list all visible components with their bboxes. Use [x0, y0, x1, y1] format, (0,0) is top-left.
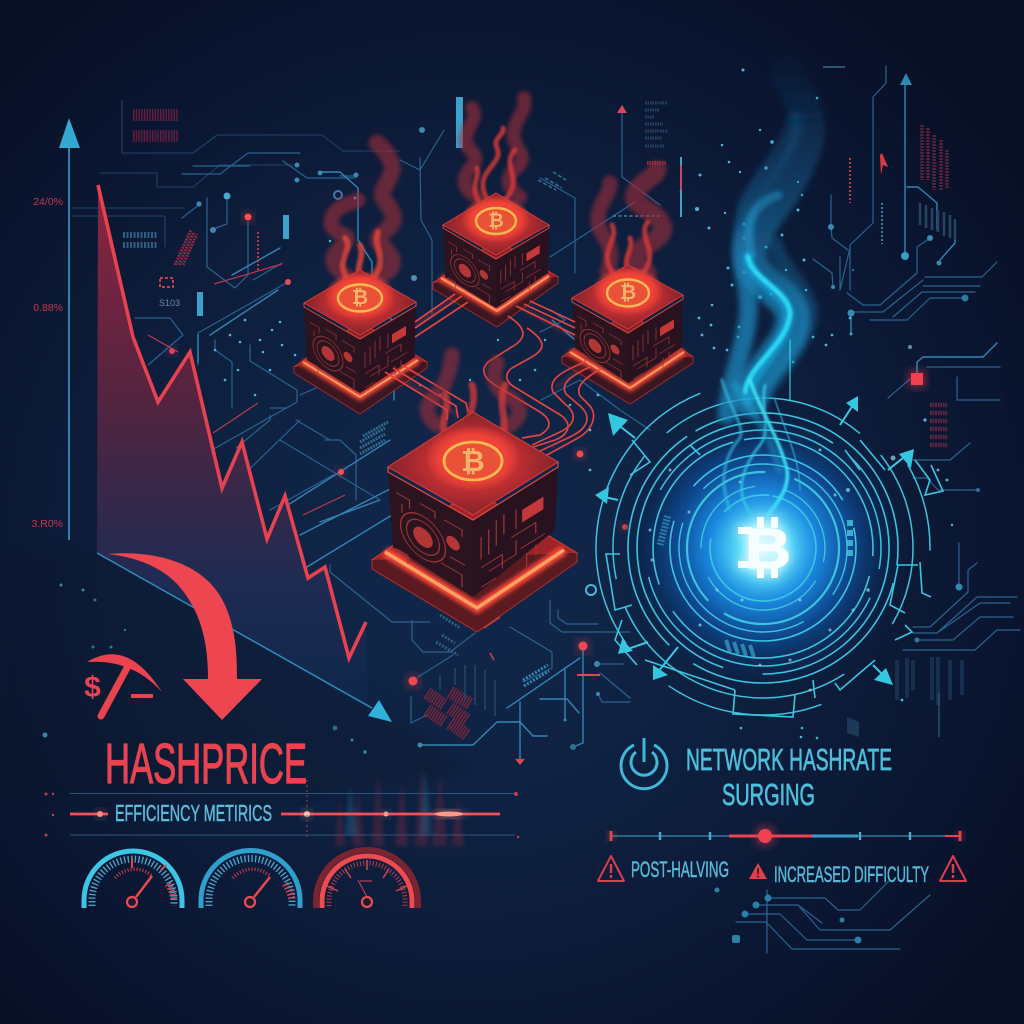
efficiency metrics band [44, 765, 519, 846]
y axis labels: 24/0% [33, 196, 63, 208]
bottom right circuits [736, 880, 930, 953]
top right circuits [813, 66, 886, 290]
icon: pickaxe and dollar: $ [84, 671, 101, 704]
icon: pickaxe and dollar [84, 654, 162, 716]
down arrow [107, 553, 262, 720]
title: hashprice: HASHPRICE [105, 732, 307, 796]
warning label: post-halving [598, 856, 729, 882]
bitcoin symbol on core: B [745, 517, 791, 581]
warning label: post-halving: POST-HALVING [631, 857, 729, 882]
y axis with arrow [59, 118, 80, 540]
flames [464, 98, 524, 200]
cube: right miner: ₿ [620, 280, 636, 304]
y axis labels: 3.R0% [31, 518, 63, 530]
timeline slider [608, 829, 963, 843]
efficiency metrics band: EFFICIENCY METIRICS [115, 800, 272, 826]
warning label: increased difficulty [749, 862, 929, 887]
gauge three [316, 850, 418, 908]
title: network hashrate surging: NETWORK HASHRATE [686, 742, 892, 777]
cube: left miner [294, 143, 427, 414]
cube: large front miner: ₿ [461, 444, 485, 478]
wires between miners [385, 294, 602, 456]
cube: top miner: ₿ [488, 210, 504, 232]
chart floor shading [0, 548, 470, 800]
y axis labels [31, 196, 63, 530]
flames [331, 143, 393, 280]
hashrate rings [535, 320, 991, 776]
cube: large front miner [372, 355, 577, 632]
outward arrows [595, 396, 914, 685]
cube: left miner: ₿ [352, 285, 368, 309]
icon: power [621, 738, 667, 789]
blue glowing core [613, 398, 913, 698]
hashprice decline chart [97, 185, 392, 722]
lower center circuits [420, 647, 583, 760]
particles [42, 68, 953, 754]
top center circuits [540, 108, 660, 273]
gauge two [201, 850, 300, 908]
title: network hashrate surging [686, 742, 892, 812]
y axis labels: 0.88% [33, 302, 63, 314]
circuit nodes and markers [123, 67, 980, 944]
circuit nodes and markers: S103 [159, 298, 180, 308]
flames [427, 355, 519, 450]
blue energy flame [722, 73, 810, 515]
flames [598, 170, 663, 273]
cube: top miner [433, 98, 558, 327]
warning icon right [940, 856, 966, 881]
cube: right miner [562, 170, 693, 404]
right middle circuits [903, 443, 1020, 650]
gauge one [84, 851, 182, 908]
title: network hashrate surging: SURGING [722, 777, 815, 812]
